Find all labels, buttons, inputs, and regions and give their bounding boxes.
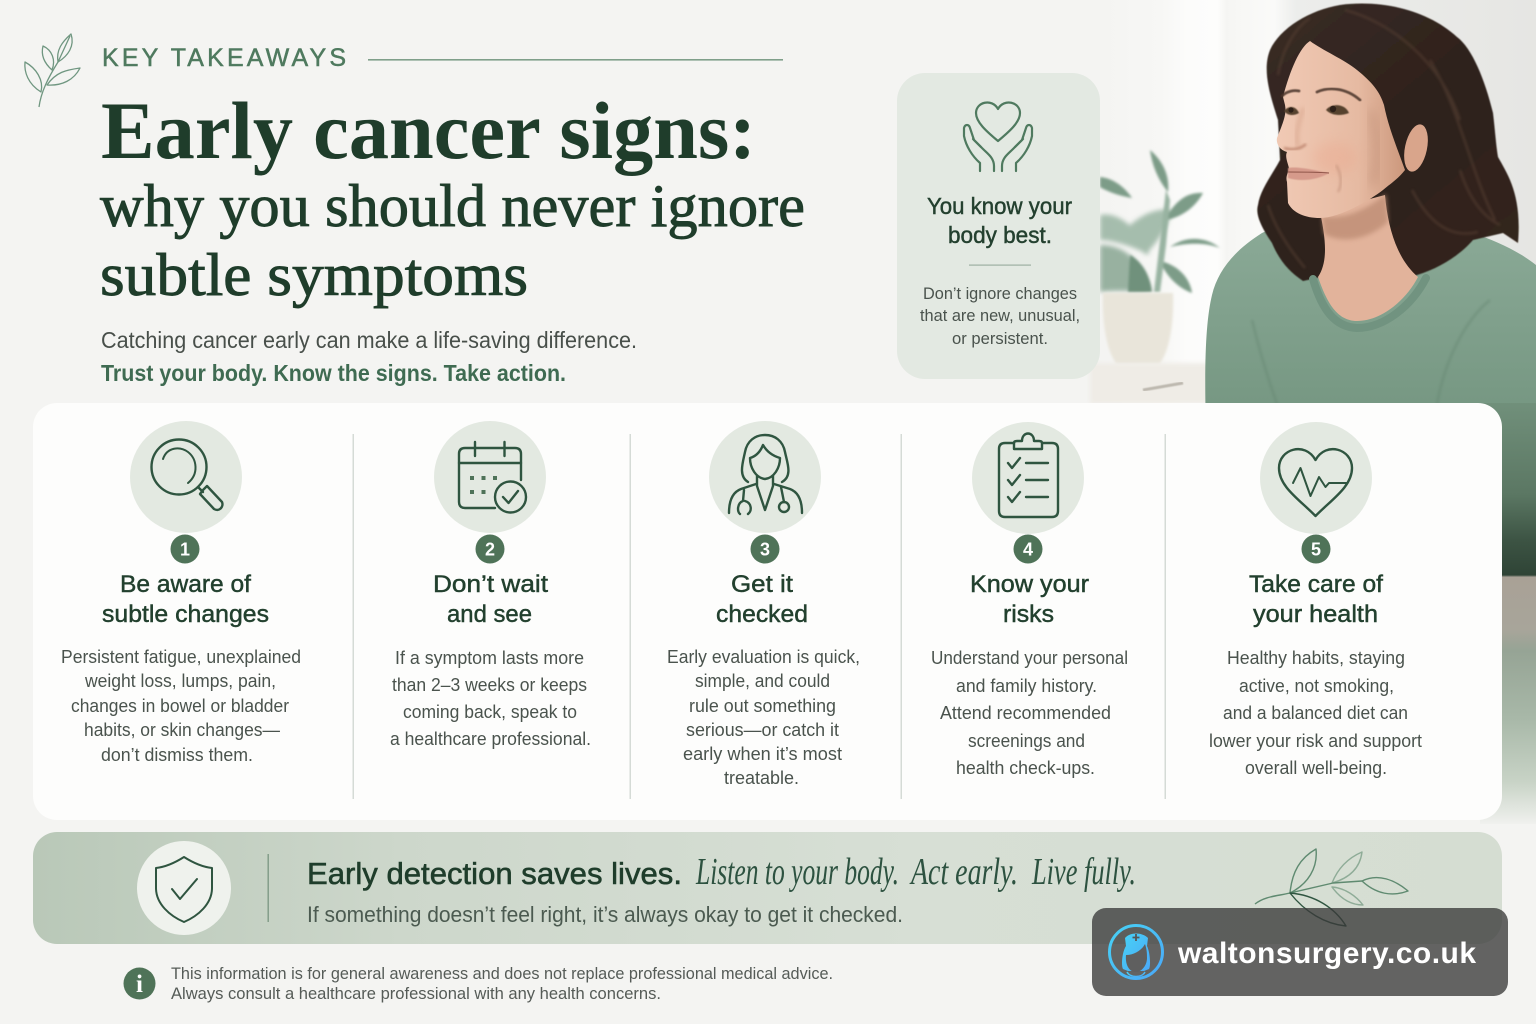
mouth — [1288, 168, 1329, 180]
step 2: don't wait and see: a healthcare professional. — [390, 729, 591, 749]
eyebrow heading: key takeaways: KEY TAKEAWAYS — [102, 44, 346, 72]
step 2: don't wait and see: and see — [447, 601, 532, 628]
main title: why you should never ignore — [100, 173, 805, 239]
step 3: get it checked: Early evaluation is quick, — [667, 647, 860, 667]
step 4: know your risks — [931, 422, 1128, 778]
banner headline: Early detection saves lives. — [307, 856, 682, 891]
icon: heart in hands — [964, 102, 1032, 171]
photo: bright room with window — [1090, 0, 1536, 404]
step 4: know your risks: Attend recommended — [940, 703, 1111, 723]
banner script line: Listen to your body. — [695, 851, 899, 893]
panel heading — [927, 193, 1072, 248]
icon: nurse logo — [1110, 926, 1162, 978]
panel heading: body best. — [948, 222, 1052, 248]
sweater — [1205, 215, 1536, 430]
icon: clipboard checklist — [999, 434, 1058, 517]
step 5: take care of your health: your health — [1253, 601, 1378, 628]
panel text: or persistent. — [952, 329, 1048, 348]
step 3: get it checked: rule out something — [689, 696, 836, 716]
panel text: that are new, unusual, — [920, 306, 1080, 325]
eyebrows — [1282, 89, 1360, 100]
step 5: take care of your health: active, not smoking, — [1239, 676, 1394, 696]
watermark badge — [1092, 908, 1508, 996]
eyes — [1284, 105, 1349, 115]
nose shadow — [1284, 144, 1306, 149]
step 4: know your risks: Understand your personal — [931, 648, 1128, 668]
decorative branch — [1255, 849, 1408, 926]
step 4: know your risks: screenings and — [968, 731, 1085, 751]
ear — [1400, 122, 1432, 174]
step 5: take care of your health: Healthy habits, staying — [1227, 648, 1405, 668]
step 2: don't wait and see: coming back, speak to — [403, 702, 577, 722]
step 4: know your risks: risks — [1003, 601, 1054, 628]
step 4: know your risks: Know your — [970, 571, 1089, 598]
step 2: don't wait and see: Don’t wait — [433, 571, 548, 598]
icon: calendar with check — [459, 442, 526, 512]
disclaimer: i — [136, 971, 143, 998]
step 5: take care of your health: lower your risk and support — [1209, 731, 1422, 751]
step 3: get it checked: treatable. — [724, 768, 799, 788]
disclaimer: Always consult a healthcare professional with any health concerns. — [171, 985, 661, 1003]
icon: doctor with stethoscope — [729, 435, 802, 514]
step 1: be aware of subtle changes: weight loss, lumps, pain, — [84, 671, 276, 691]
disclaimer: This information is for general awareness and does not replace professional medical advice. — [171, 965, 833, 983]
intro text: Catching cancer early can make a life-saving difference. — [101, 327, 637, 353]
decorative leaf sprig — [25, 34, 80, 107]
step 1: be aware of subtle changes: habits, or skin changes— — [84, 720, 280, 740]
face — [1277, 41, 1405, 218]
step 1: be aware of subtle changes — [61, 421, 301, 765]
icon: shield with check — [156, 857, 212, 922]
panel text: Don’t ignore changes — [923, 284, 1077, 303]
step 1: be aware of subtle changes: Persistent fatigue, unexplained — [61, 647, 301, 667]
step 5: take care of your health: Take care of — [1249, 571, 1383, 598]
step 2: don't wait and see — [390, 421, 591, 749]
intro text — [101, 327, 637, 386]
photo: potted plant — [1100, 150, 1220, 363]
panel heading: You know your — [927, 193, 1072, 219]
banner script line: Act early. — [909, 851, 1018, 893]
hair — [1257, 4, 1519, 285]
step 2: don't wait and see: If a symptom lasts more — [395, 648, 584, 668]
step 2: don't wait and see: than 2–3 weeks or keeps — [392, 675, 587, 695]
step 3: get it checked: 3 — [760, 540, 770, 560]
step 4: know your risks: health check-ups. — [956, 758, 1095, 778]
step 3: get it checked: simple, and could — [695, 671, 830, 691]
icon: magnifying glass — [152, 440, 222, 510]
step 4: know your risks: 4 — [1023, 540, 1033, 560]
intro text: Trust your body. Know the signs. Take action. — [101, 360, 566, 386]
panel: you know your body best — [897, 73, 1100, 379]
step 1: be aware of subtle changes: changes in bowel or bladder — [71, 696, 289, 716]
step 4: know your risks: and family history. — [956, 676, 1097, 696]
banner subline: If something doesn’t feel right, it’s always okay to get it checked. — [307, 902, 903, 927]
step 1: be aware of subtle changes: 1 — [180, 540, 190, 560]
main title: subtle symptoms — [100, 242, 528, 308]
step 3: get it checked: Get it — [731, 571, 793, 598]
photo: woman looking towards the window — [1205, 4, 1536, 430]
step 5: take care of your health — [1209, 422, 1422, 778]
step 5: take care of your health: and a balanced diet can — [1223, 703, 1408, 723]
step 1: be aware of subtle changes: Be aware of — [120, 571, 251, 598]
step 5: take care of your health: 5 — [1311, 540, 1321, 560]
banner script line — [695, 851, 1136, 893]
step 3: get it checked — [667, 421, 860, 788]
disclaimer — [124, 965, 833, 1003]
step 1: be aware of subtle changes: subtle changes — [102, 601, 269, 628]
step 3: get it checked: checked — [716, 601, 808, 628]
step 5: take care of your health: overall well-being. — [1245, 758, 1387, 778]
banner: early detection saves lives — [33, 832, 1502, 944]
sweater collar — [1313, 278, 1426, 328]
photo continuation right of the card — [1480, 403, 1536, 824]
main title: Early cancer signs: — [101, 85, 756, 176]
step 3: get it checked: serious—or catch it — [686, 720, 839, 740]
step 1: be aware of subtle changes: don’t dismiss them. — [101, 745, 253, 765]
banner script line: Live fully. — [1031, 851, 1136, 893]
icon: heart with pulse — [1279, 449, 1352, 516]
main title — [100, 85, 805, 308]
panel: five steps card — [33, 403, 1502, 820]
neck — [1318, 195, 1418, 321]
step 2: don't wait and see: 2 — [485, 540, 495, 560]
watermark badge: waltonsurgery.co.uk — [1177, 937, 1476, 970]
step 3: get it checked: early when it’s most — [683, 744, 842, 764]
panel text — [920, 284, 1080, 348]
